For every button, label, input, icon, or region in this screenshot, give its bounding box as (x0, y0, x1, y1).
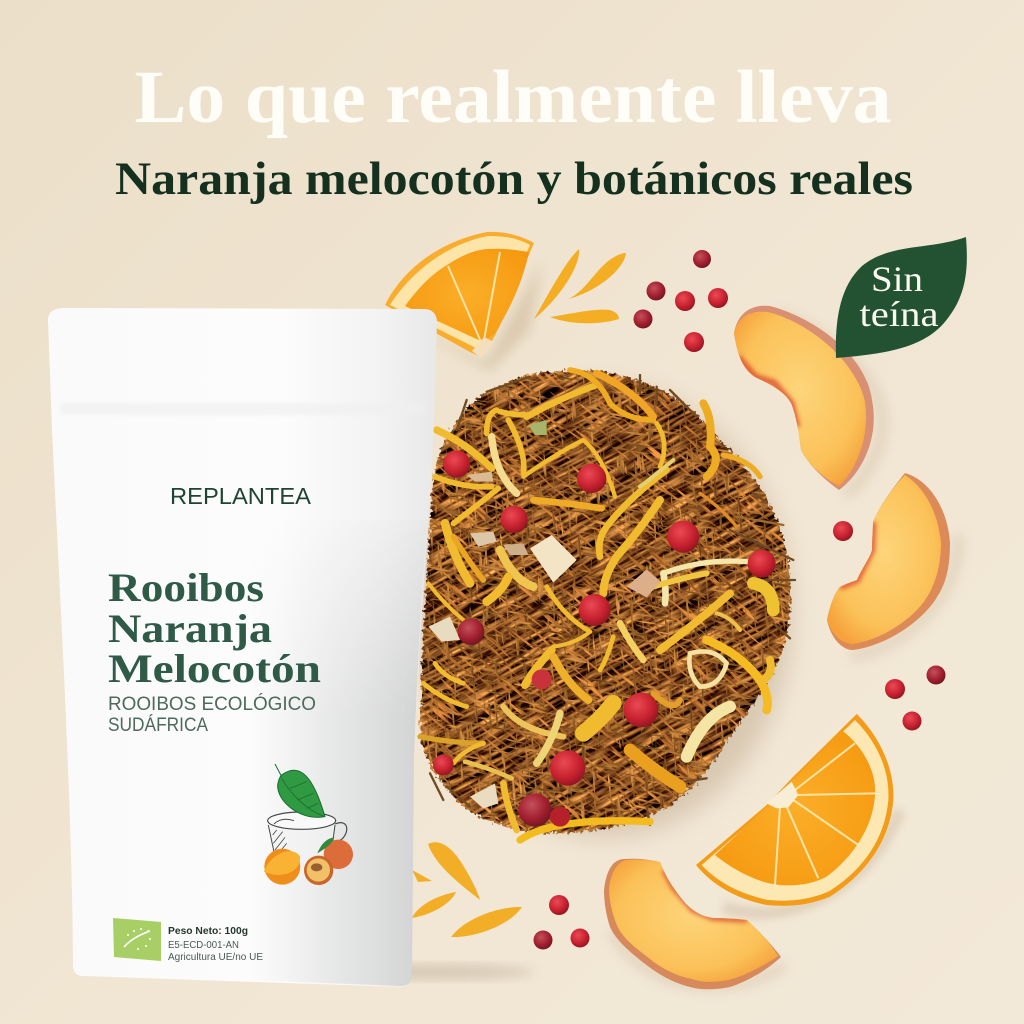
peppercorns bottom (534, 895, 590, 950)
product descriptor: ROOIBOS ECOLÓGICO (108, 693, 316, 715)
orange half (264, 849, 300, 885)
orange slice top (385, 232, 542, 372)
leaf (275, 764, 325, 817)
yellow petals (420, 370, 773, 840)
peach slice right middle (827, 473, 958, 656)
product pouch (48, 308, 437, 987)
badge text (860, 259, 939, 334)
product name: Naranja (108, 606, 272, 651)
tea blend heap (417, 367, 800, 845)
product info: Peso Neto: 100g (168, 925, 248, 937)
badge text: teína (860, 294, 939, 334)
product info: Agricultura UE/no UE (168, 952, 263, 963)
orange slice bottom (696, 714, 900, 913)
title: Lo que realmente lleva (134, 56, 892, 139)
loose petals bottom (412, 842, 522, 937)
product info: E5-ECD-001-AN (168, 940, 239, 951)
peach slice bottom (604, 859, 785, 989)
red peppercorns (433, 450, 776, 827)
badge text: Sin (871, 259, 923, 299)
peach (324, 840, 353, 869)
pink peppercorns top (634, 250, 728, 352)
peach slice right top (734, 306, 882, 495)
product info (168, 925, 263, 963)
peppercorns right (833, 521, 946, 730)
cup illustration (264, 764, 353, 885)
peach half (304, 856, 333, 885)
protruding needles (430, 375, 795, 825)
product name: Rooibos (108, 565, 264, 610)
product name (108, 565, 321, 691)
leaf badge (836, 237, 967, 358)
subtitle: Naranja melocotón y botánicos reales (115, 153, 913, 205)
organic logo (113, 918, 161, 961)
brand logo: REPLANTEA (170, 483, 312, 509)
product descriptor: SUDÁFRICA (108, 715, 208, 736)
chunks (428, 420, 661, 808)
loose petals top (534, 249, 626, 323)
product descriptor (108, 693, 316, 736)
product name: Melocotón (108, 646, 321, 691)
bag shadow (325, 965, 535, 979)
